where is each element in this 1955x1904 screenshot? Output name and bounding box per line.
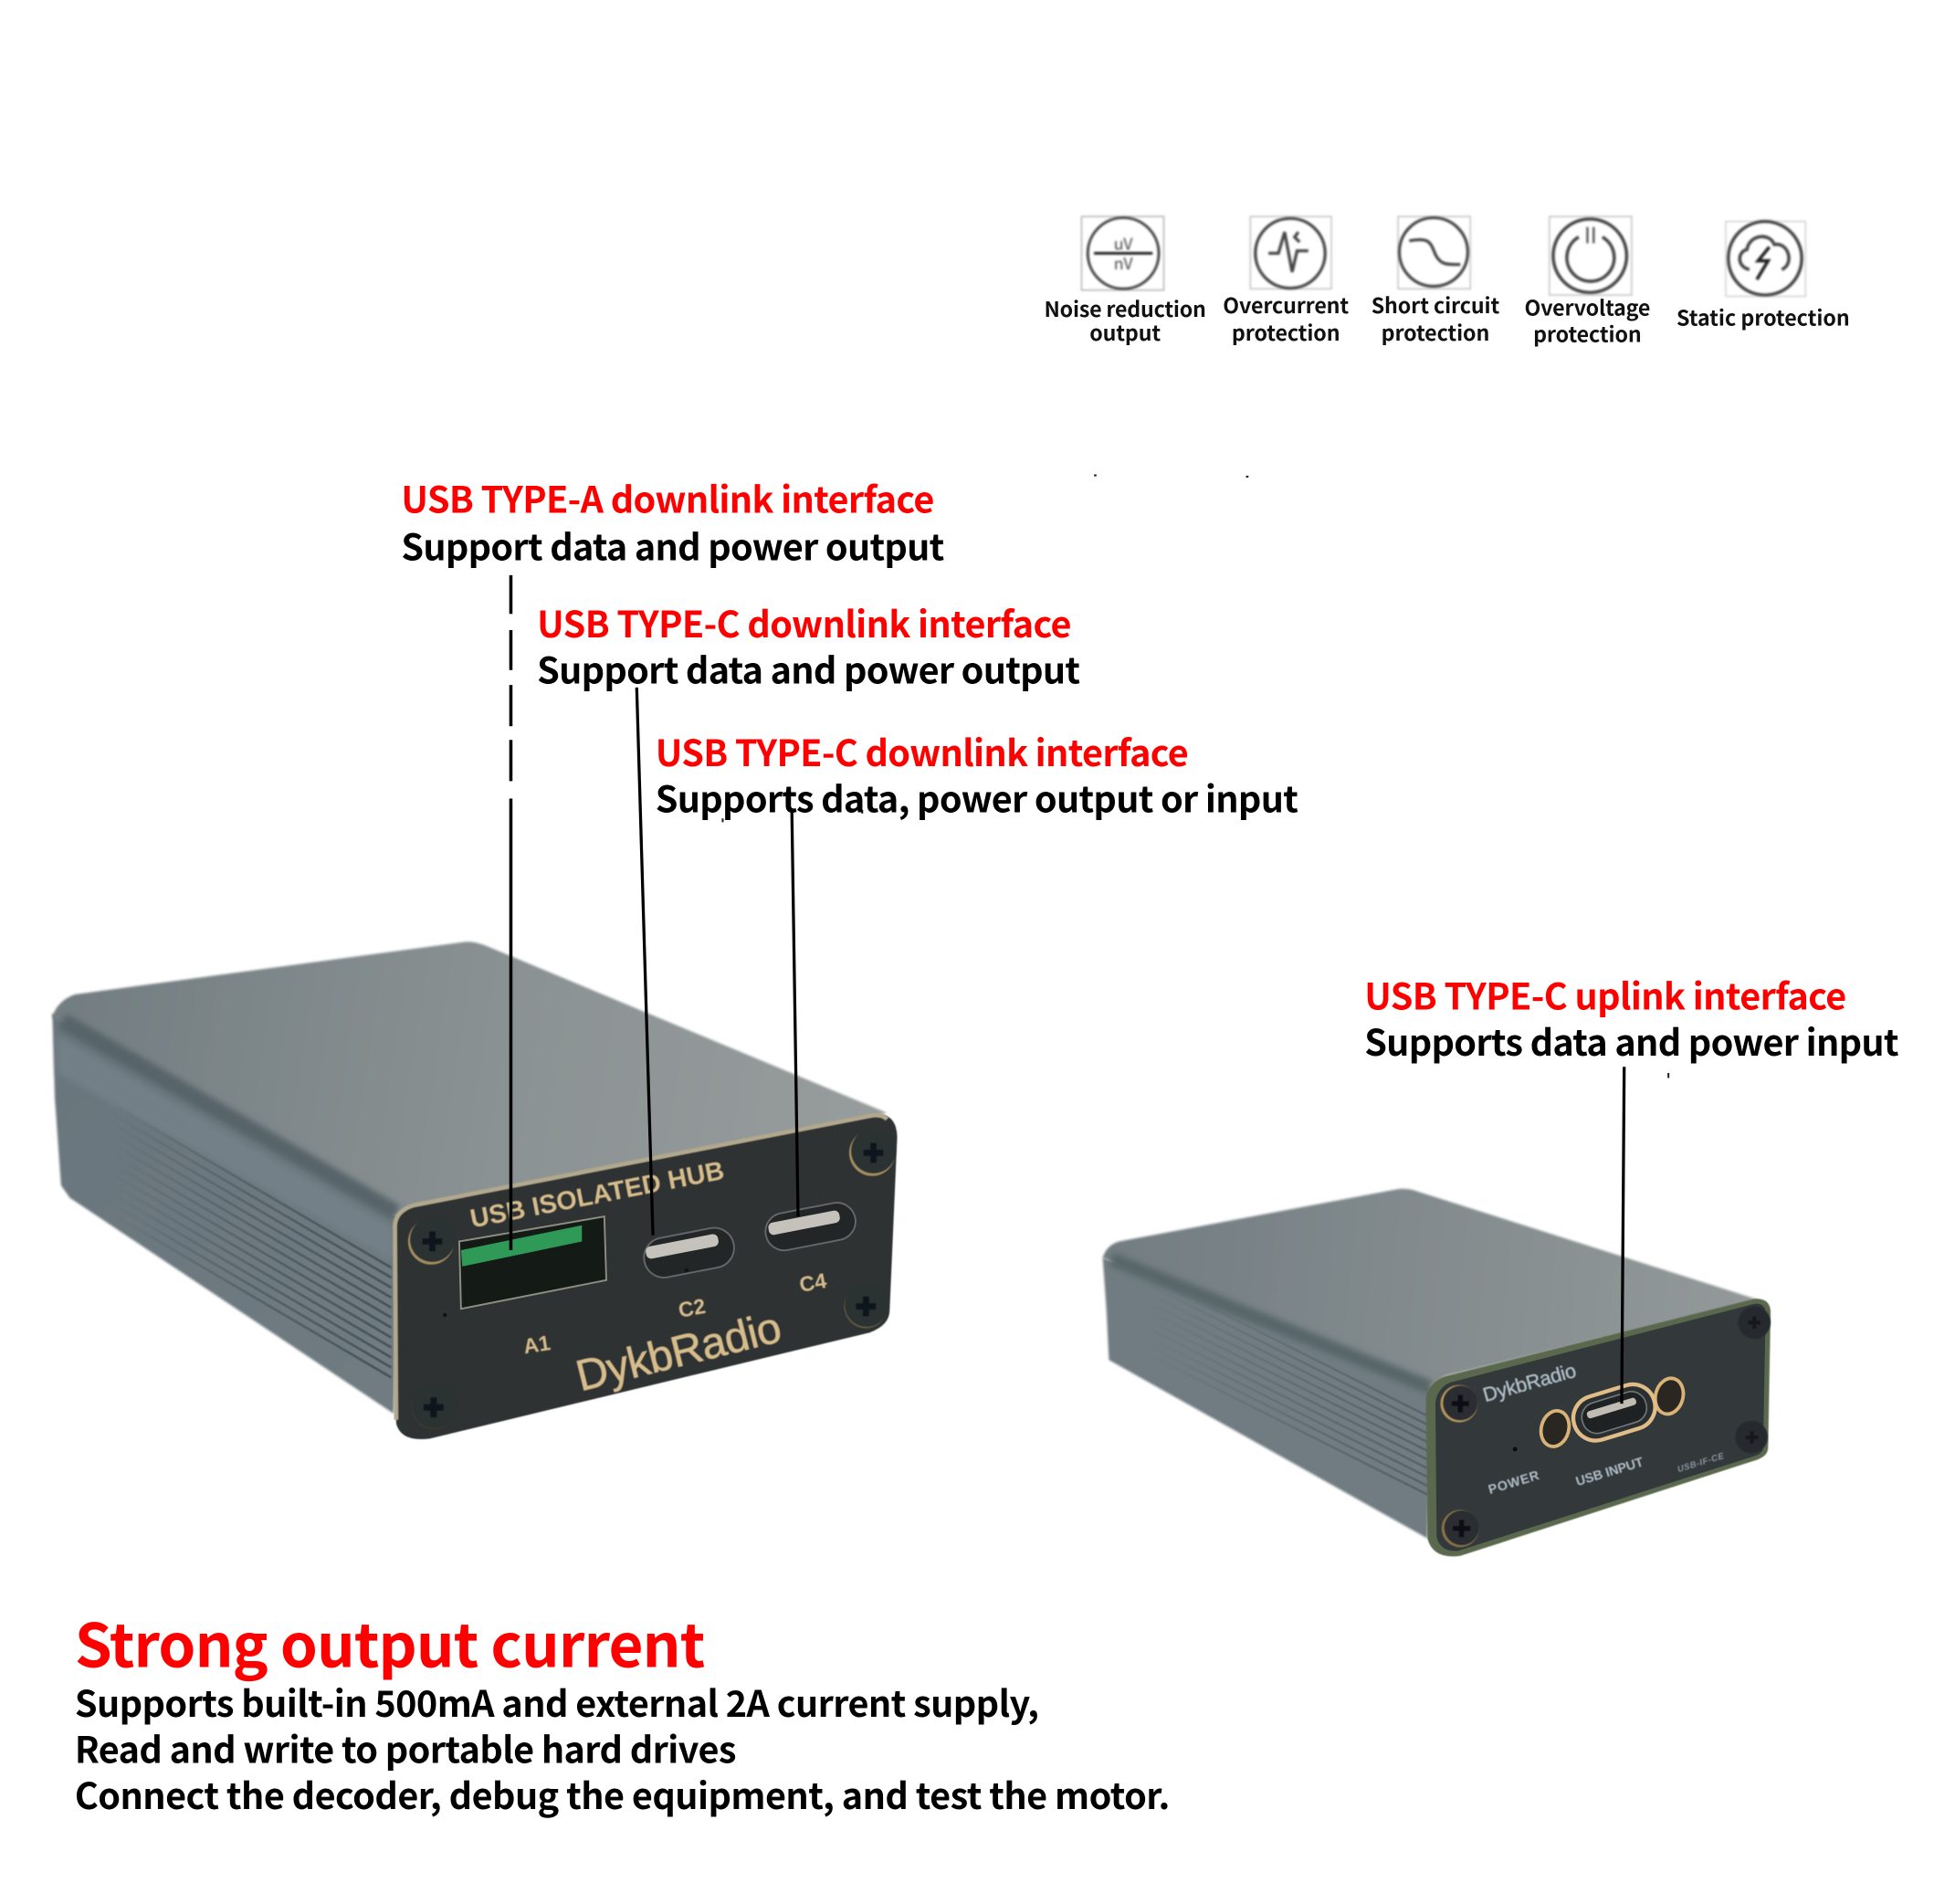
rear top face <box>1103 1189 1760 1387</box>
callout: USB-C C2 downlink <box>537 596 1080 695</box>
leader line: USB-C C2 <box>636 688 653 1236</box>
hub front panel <box>394 1114 897 1439</box>
label: static protection: Static protection <box>1676 301 1850 332</box>
body text: Connect the decoder, debug the equipment, and test the motor. <box>75 1768 1170 1820</box>
USB-A port <box>459 1216 606 1309</box>
body text <box>75 1676 1170 1820</box>
body text: Read and write to portable hard drives <box>75 1722 736 1774</box>
label: short circuit protection: Short circuit <box>1372 289 1499 320</box>
label: overcurrent protection <box>1223 289 1349 347</box>
hub rounded edge <box>62 1021 396 1213</box>
callout: USB-C C4 downlink <box>656 725 1298 823</box>
rear panel printing: DykbRadio <box>1480 1359 1579 1406</box>
rear panel printing: USB-IF-CE <box>1676 1451 1726 1475</box>
USB-C port C2 <box>641 1225 738 1281</box>
callout: USB-A downlink: USB TYPE-A downlink interface <box>401 472 934 524</box>
callout: USB-C C4 downlink: Supports data, power output or input <box>656 771 1298 823</box>
leader line: USB-C uplink <box>1622 1067 1624 1404</box>
label: overcurrent protection: protection <box>1232 316 1340 347</box>
callout: USB-C uplink <box>1364 968 1899 1067</box>
label: overvoltage protection: Overvoltage <box>1525 291 1650 322</box>
side holes <box>1537 1407 1573 1449</box>
body text: Supports built-in 500mA and external 2A current supply, <box>75 1676 1039 1728</box>
callout: USB-C C2 downlink: USB TYPE-C downlink interface <box>537 596 1072 648</box>
icon: static protection <box>1726 222 1805 297</box>
label: overvoltage protection <box>1525 291 1650 348</box>
rear panel printing: POWER <box>1487 1468 1541 1498</box>
icon: overcurrent <box>1250 216 1331 289</box>
panel printing: C2 <box>677 1294 708 1322</box>
icon: overvoltage <box>1550 216 1632 295</box>
panel printing: USB ISOLATED HUB <box>468 1156 727 1234</box>
callout: USB-C uplink: Supports data and power input <box>1364 1015 1899 1067</box>
label: overvoltage protection: protection <box>1533 317 1642 348</box>
feature icon row <box>1045 216 1850 348</box>
label: short circuit protection <box>1372 289 1499 347</box>
callout: USB-C uplink: USB TYPE-C uplink interface <box>1364 968 1846 1020</box>
USB-A green tongue <box>461 1226 582 1267</box>
screws <box>408 1129 896 1429</box>
panel printing: DykbRadio <box>572 1303 786 1401</box>
label: noise reduction output: Noise reduction <box>1045 292 1206 323</box>
icon: noise reduction: nV <box>1114 251 1133 275</box>
rear panel <box>1426 1299 1771 1556</box>
label: overcurrent protection: Overcurrent <box>1223 289 1349 320</box>
rear panel printing <box>1480 1359 1726 1498</box>
specks <box>722 476 1668 1078</box>
hub top face <box>52 941 888 1216</box>
USB-C input port <box>1568 1379 1661 1446</box>
text block: strong output current <box>75 1597 1170 1820</box>
callout: USB-A downlink: Support data and power output <box>401 519 944 571</box>
hub side face with ribs <box>52 1013 399 1414</box>
leader line: USB-C C4 <box>792 811 798 1216</box>
leader line: USB-A <box>510 575 512 1250</box>
icon: noise reduction: uV <box>1114 231 1133 255</box>
label: noise reduction output: output <box>1089 316 1161 347</box>
panel printing: A1 <box>521 1331 552 1358</box>
product photo: hub rear with uplink port <box>1103 1189 1771 1556</box>
rear screws <box>1440 1307 1771 1547</box>
callout: USB-A downlink <box>401 472 944 571</box>
icon: noise reduction <box>1081 216 1164 290</box>
panel printing <box>468 1156 828 1401</box>
rear rounded edge <box>1111 1259 1431 1387</box>
heading: Strong output current <box>75 1597 705 1684</box>
panel printing: C4 <box>797 1268 828 1297</box>
product photo: hub front with downlink ports <box>52 941 897 1439</box>
panel specks <box>445 1270 687 1315</box>
label: noise reduction output <box>1045 292 1206 347</box>
rear side face with ribs <box>1103 1257 1431 1539</box>
rear panel printing: USB INPUT <box>1574 1455 1645 1489</box>
label: short circuit protection: protection <box>1382 316 1489 347</box>
icon: short circuit <box>1398 216 1470 289</box>
callout: USB-C C4 downlink: USB TYPE-C downlink interface <box>656 725 1189 777</box>
callout: USB-C C2 downlink: Support data and power output <box>537 643 1080 695</box>
USB-C port C4 <box>762 1199 858 1254</box>
